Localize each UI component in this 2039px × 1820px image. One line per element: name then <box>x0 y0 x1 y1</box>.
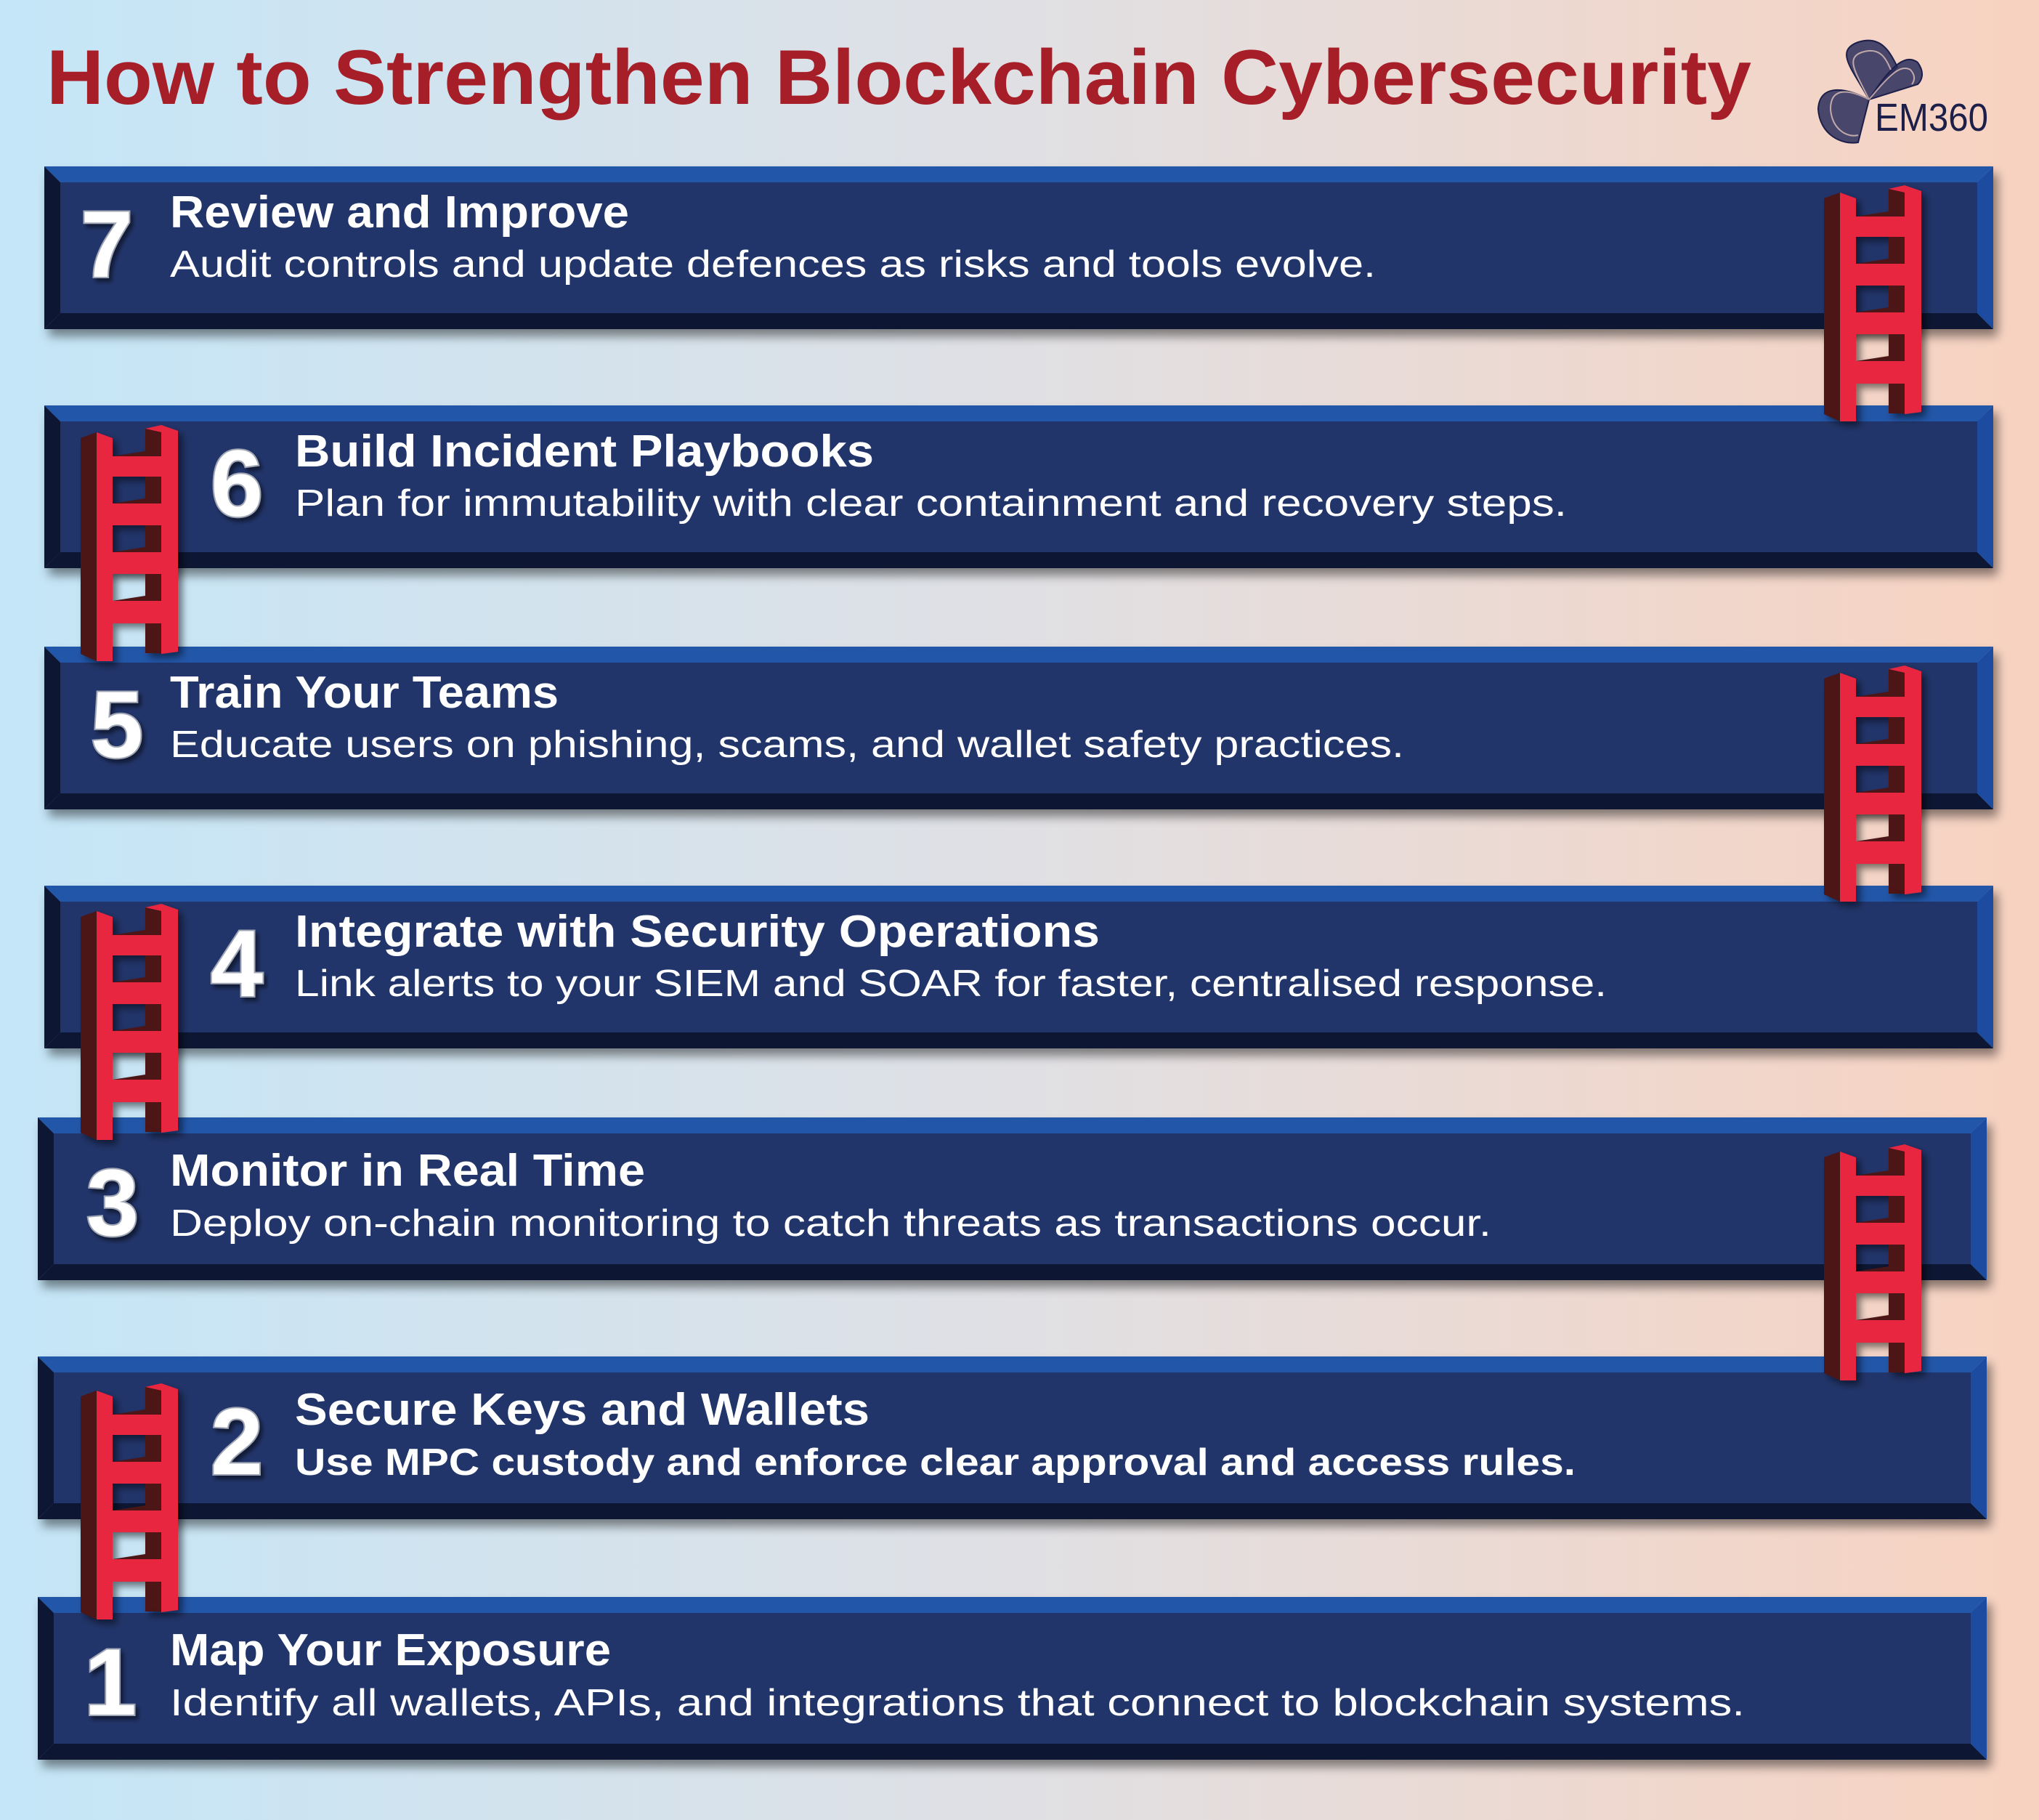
heading 5: Train Your Teams <box>170 668 559 718</box>
heading 2: Secure Keys and Wallets <box>295 1385 869 1435</box>
panel 6 <box>44 405 1993 568</box>
number 6: 6 <box>211 430 263 536</box>
panel 7 <box>44 166 1993 329</box>
number 7: 7 <box>81 191 133 297</box>
panel 1 <box>38 1597 1987 1760</box>
number 2: 2 <box>211 1388 263 1495</box>
heading 3: Monitor in Real Time <box>170 1146 645 1196</box>
description 1: Identify all wallets, APIs, and integrations that connect to blockchain systems. <box>170 1682 1745 1724</box>
number 3: 3 <box>86 1149 139 1255</box>
number 4: 4 <box>211 910 263 1016</box>
number 5: 5 <box>91 671 143 777</box>
panel 2 <box>38 1356 1987 1519</box>
heading 7: Review and Improve <box>170 187 629 238</box>
description 4: Link alerts to your SIEM and SOAR for faster, centralised response. <box>295 963 1607 1005</box>
description 3: Deploy on-chain monitoring to catch threats as transactions occur. <box>170 1202 1491 1245</box>
ladder: 4 to 3 <box>81 904 178 1140</box>
description 5: Educate users on phishing, scams, and wallet safety practices. <box>170 724 1404 766</box>
panel 4 <box>44 886 1993 1048</box>
ladder: 2 to 1 <box>81 1383 178 1619</box>
heading 6: Build Incident Playbooks <box>295 426 874 477</box>
heading 4: Integrate with Security Operations <box>295 907 1100 957</box>
panel 3 <box>38 1117 1987 1280</box>
icon: logo swirl <box>1818 41 1922 143</box>
logo: EM360 <box>1818 41 1988 143</box>
logo text: EM360 <box>1875 96 1988 139</box>
heading 1: Map Your Exposure <box>170 1625 611 1675</box>
title: How to Strengthen Blockchain Cybersecurity <box>46 33 1751 121</box>
description 6: Plan for immutability with clear containment and recovery steps. <box>295 482 1567 525</box>
ladder: 5 to 4 <box>1824 666 1921 902</box>
ladder: 3 to 2 <box>1824 1144 1921 1380</box>
description 7: Audit controls and update defences as risks and tools evolve. <box>170 243 1376 286</box>
description 2: Use MPC custody and enforce clear approval and access rules. <box>295 1441 1576 1484</box>
number 1: 1 <box>84 1629 137 1735</box>
ladder: 6 to 5 <box>81 425 178 661</box>
ladder: 7 to 6 <box>1824 185 1921 421</box>
panel 5 <box>44 647 1993 809</box>
